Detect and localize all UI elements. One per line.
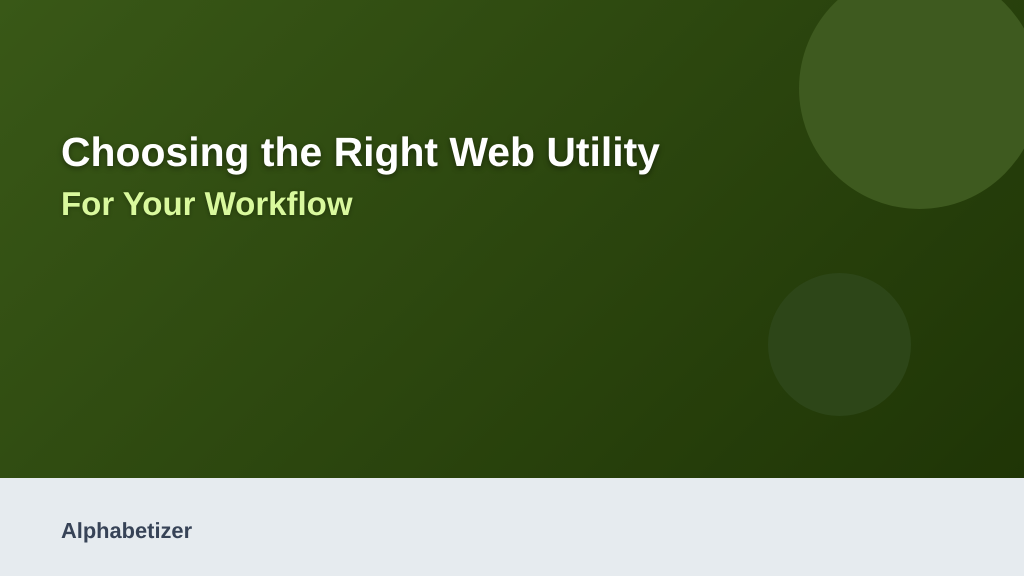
title: Choosing the Right Web Utility <box>61 129 660 175</box>
decorative circle: top right <box>799 0 1024 209</box>
panel: footer <box>0 478 1024 576</box>
decorative circle: lower right <box>768 273 911 416</box>
subtitle: For Your Workflow <box>61 184 353 222</box>
footer label: Alphabetizer <box>61 518 192 543</box>
